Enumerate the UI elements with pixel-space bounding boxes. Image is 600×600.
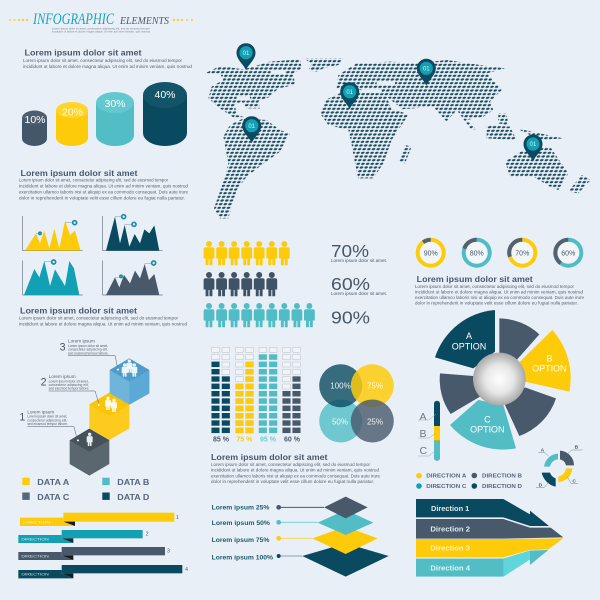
heading: area charts: Lorem ipsum dolor sit amet [20, 168, 138, 178]
stacked cubes: consectetur adipiscing elit, [49, 383, 89, 387]
direction arrows: Direction 2 [430, 526, 470, 533]
stacked cubes: sed eiusmod tempor labore. [27, 422, 68, 426]
people pictogram [204, 241, 315, 327]
heading: layers: Lorem ipsum dolor sit amet [211, 452, 328, 462]
cylinder chart: 40% [154, 89, 176, 101]
layered diamonds: Lorem ipsum 25% [212, 504, 270, 511]
heading: layers: exercitation ullamco laboris nisi ut aliquip ex ea commodo consequat. Duis aute irure [211, 473, 380, 478]
mini donut: B [575, 445, 579, 451]
abc slider: C [420, 445, 428, 457]
stacked cubes: sed eiusmod tempor labore. [68, 351, 109, 355]
direction legend: DIRECTION D [482, 484, 522, 490]
data legend: DATA A [37, 478, 70, 487]
percentage stats: 70% [331, 241, 369, 261]
column meter chart: 95 % [260, 436, 277, 443]
stacked cubes: Lorem ipsum dolor sit amet, [49, 379, 89, 383]
column meter chart: 85 % [213, 436, 230, 443]
data legend: DATA D [117, 493, 150, 502]
option pie chart: B [546, 354, 552, 364]
mini donut: D [539, 483, 543, 489]
heading: layers: incididunt ut labore et dolore magna aliqua. Ut enim ad minim veniam, quis nostrud [211, 468, 379, 473]
progress rings: 90% [424, 250, 438, 257]
abc slider: A [420, 411, 427, 423]
stacked cubes: 1 [19, 412, 25, 424]
venn circles [319, 364, 394, 442]
map pins: 01 [530, 142, 537, 148]
stacked cubes: Lorem ipsum [68, 339, 95, 344]
stacked cubes: Lorem ipsum dolor sit amet, [68, 344, 108, 348]
direction bars: DIRECTION [21, 537, 49, 542]
stacked cubes: consectetur adipiscing elit, [68, 348, 108, 352]
title: Lorem ipsum dolor sit amet, consectetur adipiscing elit, sed do eiusmod tempor [52, 26, 150, 30]
heading: area charts [19, 168, 188, 201]
direction arrows: Direction 1 [431, 506, 469, 513]
mini donut: A [541, 448, 545, 454]
percentage stats: 90% [331, 308, 370, 328]
direction bars: DIRECTION [21, 572, 49, 577]
heading: cylinders [23, 48, 192, 69]
direction bars: 2 [146, 532, 149, 538]
map pins: 01 [346, 90, 354, 96]
data legend: DATA C [37, 493, 70, 502]
cylinder chart: 10% [24, 114, 46, 126]
direction arrows [416, 499, 563, 577]
progress rings: 70% [515, 250, 529, 257]
option pie chart [435, 310, 571, 450]
cylinder chart [22, 82, 187, 146]
direction legend: DIRECTION C [426, 484, 466, 490]
column meter chart: 75 % [236, 436, 253, 443]
percentage stats: Lorem ipsum dolor sit amet. [331, 291, 387, 296]
stacked cubes [19, 339, 149, 476]
percentage stats [331, 241, 387, 328]
layered diamonds [212, 497, 389, 577]
percentage stats: 60% [331, 274, 370, 294]
heading: layers: dolor in reprehenderit in voluptate velit esse cillum dolore eu fugiat nulla pariatur. [211, 479, 374, 484]
data legend: DATA B [117, 478, 150, 487]
heading: cylinders: Lorem ipsum dolor sit amet [24, 48, 142, 58]
stacked cubes: Lorem ipsum dolor sit amet, [27, 415, 67, 419]
percentage stats: Lorem ipsum dolor sit amet. [331, 258, 387, 263]
stacked cubes: 2 [41, 376, 47, 388]
option pie chart: OPTION [452, 341, 486, 351]
layered diamonds: Lorem ipsum 50% [212, 520, 270, 527]
heading: area charts: dolor in reprehenderit in voluptate velit esse cillum dolore eu fugiat nulla pariatur. [19, 196, 185, 201]
heading: layers: Lorem ipsum dolor sit amet, consectetur adipiscing elit, sed do eiusmod tempor [211, 462, 370, 467]
data legend [22, 478, 150, 502]
progress rings [418, 240, 581, 266]
direction bars: DIRECTION [21, 554, 49, 559]
direction arrows: Direction 3 [430, 546, 470, 553]
direction legend [416, 473, 522, 490]
heading: pie: Lorem ipsum dolor sit amet, consectetur adipiscing elit, sed do eiusmod tempor [415, 284, 574, 289]
title: ELEMENTS [119, 15, 169, 27]
map pins: 01 [243, 51, 250, 57]
heading: cubes: Lorem ipsum dolor sit amet [20, 306, 137, 316]
map pins: 01 [248, 124, 256, 130]
heading: area charts: exercitation ullamco laboris nisi ut aliquip ex ea commodo consequat. Duis aute irure [19, 190, 188, 195]
direction bars: 1 [176, 515, 179, 521]
map pins [236, 43, 542, 162]
heading: pie: incididunt ut labore et dolore magna aliqua. Ut enim ad minim veniam, quis nostrud [415, 290, 583, 295]
abc slider [418, 401, 440, 461]
mini donut: C [572, 479, 576, 485]
stacked cubes: Lorem ipsum [27, 409, 54, 414]
direction arrows: Direction 4 [430, 565, 470, 572]
map pins: 01 [423, 66, 430, 72]
heading: cubes: incididunt ut labore et dolore magna aliqua. Ut enim ad minim veniam, quis nostrud [19, 322, 187, 326]
direction bars [18, 513, 188, 578]
heading: area charts: Lorem ipsum dolor sit amet, consectetur adipiscing elit, sed do eiusmod tempor [19, 178, 168, 183]
stacked cubes: 3 [60, 342, 66, 354]
heading: cylinders: Lorem ipsum dolor sit amet, consectetur adipiscing elit, sed do eiusmod tempor [23, 58, 182, 63]
cylinder chart: 20% [62, 106, 83, 118]
venn circles: 100% [330, 382, 351, 390]
abc slider: B [420, 428, 427, 440]
direction bars: 3 [167, 548, 170, 554]
layered diamonds: Lorem ipsum 75% [212, 537, 270, 544]
heading: pie: exercitation ullamco laboris nisi ut aliquip ex ea commodo consequat. Duis aute irure [415, 295, 584, 300]
option pie chart: A [466, 331, 472, 341]
stacked cubes: consectetur adipiscing elit, [27, 418, 67, 422]
progress rings: 60% [561, 250, 575, 257]
heading: pie: Lorem ipsum dolor sit amet [417, 274, 533, 284]
world map [205, 58, 591, 218]
heading: cubes [19, 306, 187, 326]
direction legend: DIRECTION A [426, 474, 466, 480]
direction bars: 4 [185, 567, 188, 573]
direction legend: DIRECTION B [482, 474, 522, 480]
progress rings: 80% [470, 250, 484, 257]
stacked cubes: Lorem ipsum [49, 374, 76, 379]
column meter chart: 60 % [284, 436, 301, 443]
venn circles: 75% [367, 382, 383, 390]
option pie chart: OPTION [532, 364, 567, 374]
title: incididunt ut labore et dolore magna aliqua. Ut enim ad minim veniam, quis nostrud [52, 30, 150, 34]
heading: layers [211, 452, 380, 484]
title [9, 11, 193, 34]
direction bars: DIRECTION [23, 519, 50, 524]
column meter chart [212, 347, 301, 443]
heading: cubes: Lorem ipsum dolor sit amet, consectetur adipiscing elit, sed do eiusmod tempor [19, 316, 178, 320]
heading: cylinders: incididunt ut labore et dolore magna aliqua. Ut enim ad minim veniam, quis nostrud [23, 64, 192, 69]
option pie chart: OPTION [470, 425, 505, 435]
mini donut [536, 445, 582, 489]
heading: area charts: incididunt ut labore et dolore magna aliqua. Ut enim ad minim veniam, quis nostrud [19, 184, 188, 189]
option pie chart: C [484, 414, 491, 424]
title: INFOGRAPHIC [32, 11, 115, 28]
heading: pie [415, 274, 584, 305]
cylinder chart: 30% [104, 98, 126, 110]
heading: pie: dolor in reprehenderit in voluptate velit esse cillum dolore eu fugiat nulla pariatur. [415, 300, 578, 305]
stacked cubes: sed eiusmod tempor labore. [49, 387, 89, 391]
venn circles: 25% [367, 418, 383, 426]
layered diamonds: Lorem ipsum 100% [212, 555, 273, 562]
venn circles: 50% [332, 418, 348, 426]
area charts [23, 215, 163, 295]
